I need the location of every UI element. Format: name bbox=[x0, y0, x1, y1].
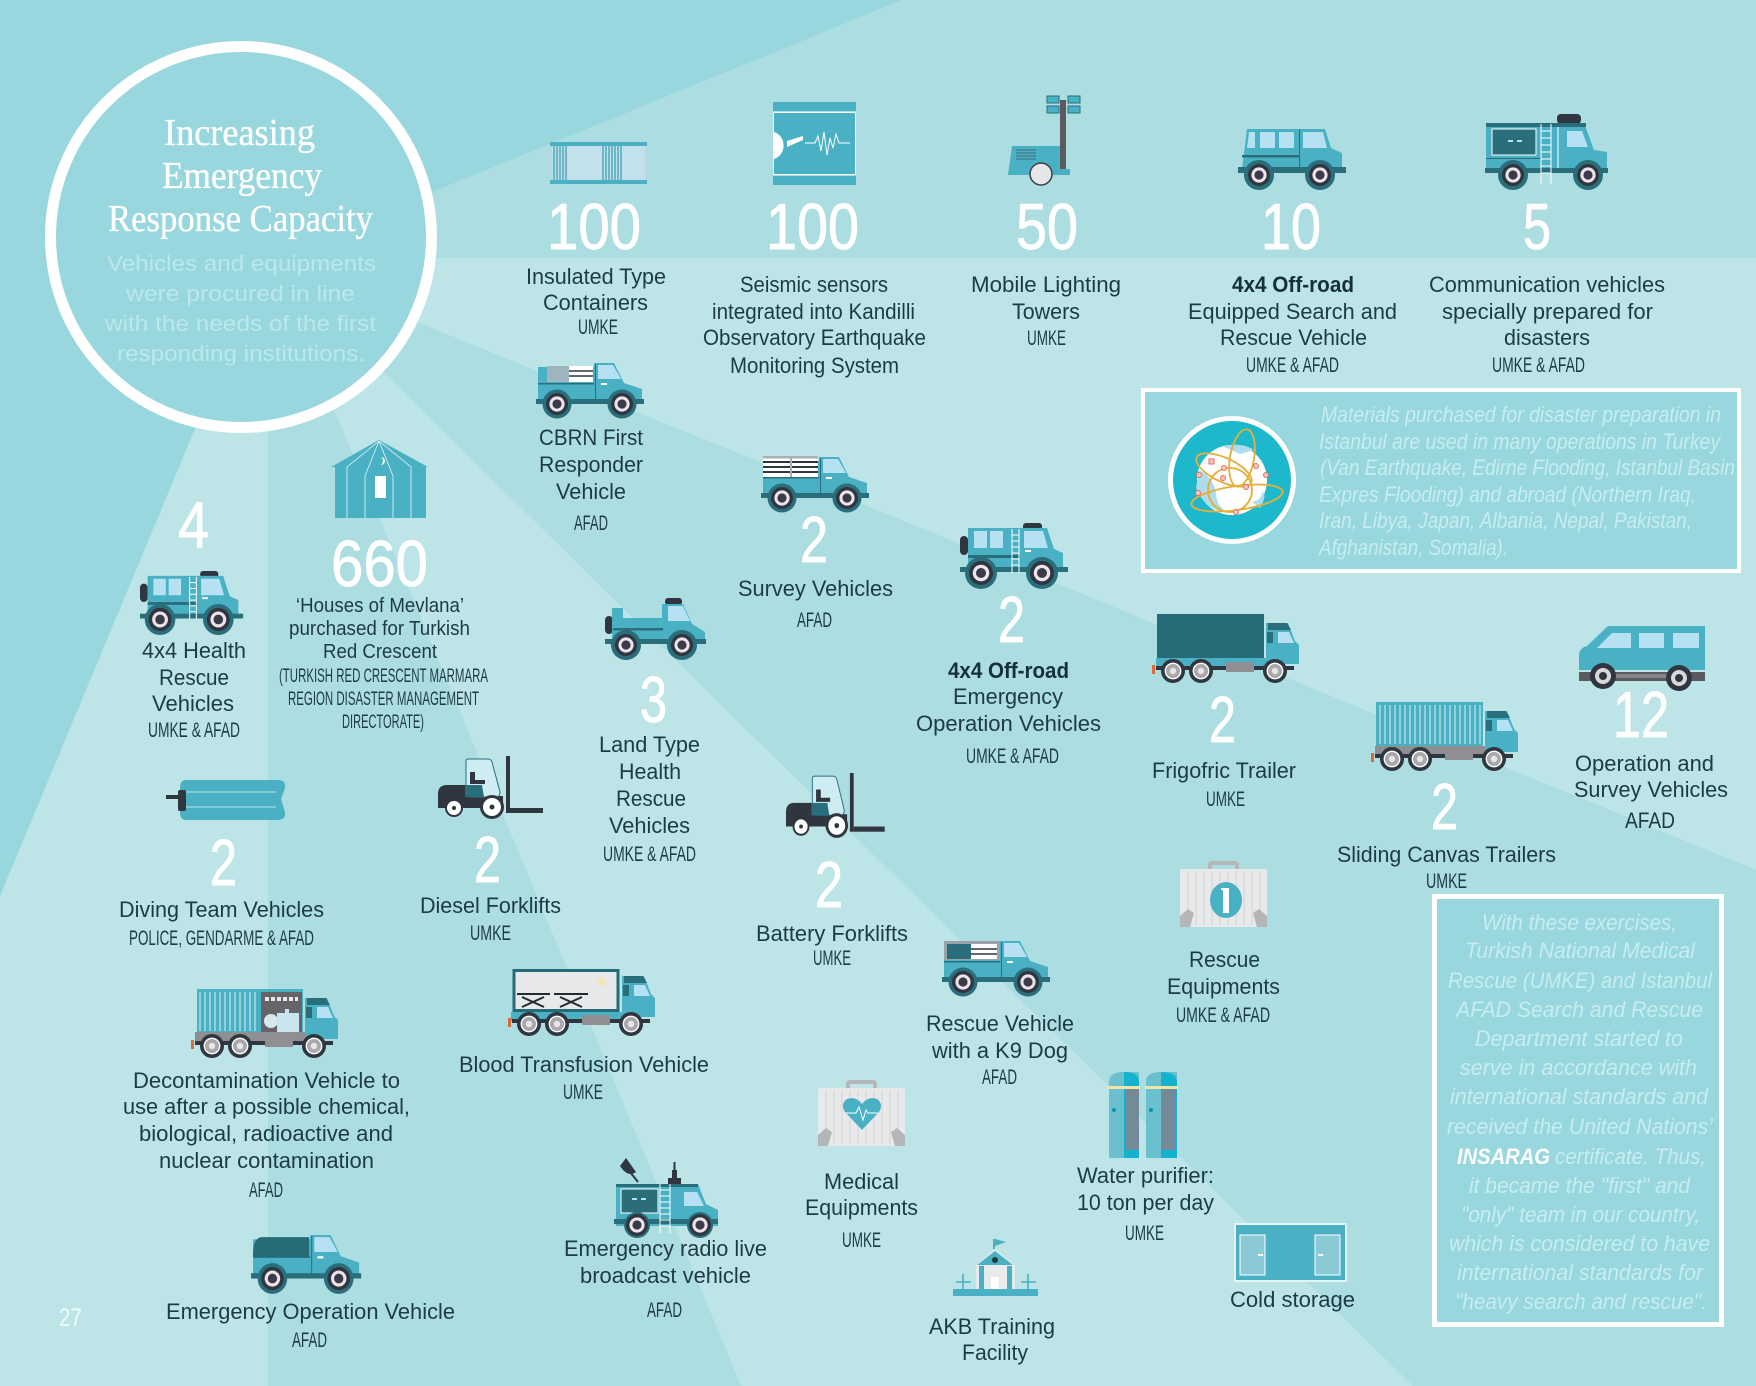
number: 2: 2 bbox=[998, 583, 1025, 656]
heading: Increasing bbox=[164, 112, 315, 154]
label: Insulated Type bbox=[526, 264, 666, 289]
item: cold storage bbox=[1230, 1224, 1355, 1312]
callout text: "only" team in our country, bbox=[1461, 1202, 1700, 1227]
label bbox=[526, 264, 666, 339]
label: Vehicles bbox=[152, 691, 234, 716]
title circle bbox=[50, 46, 432, 428]
label bbox=[166, 1299, 455, 1352]
label: Seismic sensors bbox=[740, 272, 888, 297]
label: Frigofric Trailer bbox=[1152, 758, 1296, 783]
callout text: Iran, Libya, Japan, Albania, Nepal, Pakistan, bbox=[1319, 508, 1692, 533]
label: AFAD bbox=[647, 1299, 682, 1322]
callout text: Department started to bbox=[1475, 1026, 1683, 1051]
label: purchased for Turkish bbox=[289, 618, 470, 640]
label: Blood Transfusion Vehicle bbox=[459, 1052, 709, 1077]
icon: health van bbox=[140, 571, 243, 635]
label: Red Crescent bbox=[323, 641, 437, 663]
item: CBRN first responder vehicle bbox=[536, 363, 644, 535]
icon: minivan bbox=[1579, 626, 1705, 691]
label: 4x4 Off-road bbox=[948, 658, 1069, 683]
item: 4x4 search and rescue vehicle bbox=[1188, 129, 1397, 377]
label: Observatory Earthquake bbox=[703, 325, 926, 350]
label bbox=[916, 658, 1101, 768]
item: mobile lighting towers bbox=[971, 96, 1121, 350]
item: decontamination vehicle bbox=[123, 989, 410, 1202]
label: Equipments bbox=[1167, 974, 1280, 999]
item: survey vehicles bbox=[738, 456, 893, 632]
label bbox=[1077, 1163, 1214, 1245]
page number: 27 bbox=[59, 1304, 82, 1332]
item: insulated type containers bbox=[526, 142, 666, 339]
label: Medical bbox=[824, 1169, 899, 1194]
label: Operation and bbox=[1575, 751, 1714, 776]
icon: school building bbox=[953, 1239, 1038, 1296]
label: UMKE & AFAD bbox=[966, 745, 1059, 768]
item: seismic sensors bbox=[703, 102, 926, 378]
icon: globe bbox=[1168, 416, 1296, 544]
label bbox=[738, 576, 893, 632]
label: POLICE, GENDARME & AFAD bbox=[129, 927, 314, 950]
label: AFAD bbox=[249, 1179, 283, 1202]
label bbox=[929, 1314, 1055, 1365]
label: Cold storage bbox=[1230, 1287, 1355, 1312]
label: UMKE bbox=[842, 1229, 881, 1252]
label bbox=[142, 638, 246, 742]
label: specially prepared for bbox=[1442, 299, 1653, 324]
icon: blood transfusion truck bbox=[508, 970, 655, 1036]
label: Towers bbox=[1012, 299, 1080, 324]
label: biological, radioactive and bbox=[139, 1121, 393, 1146]
label bbox=[279, 595, 488, 733]
icon: container bbox=[550, 142, 647, 184]
label bbox=[564, 1236, 767, 1322]
label: Survey Vehicles bbox=[738, 576, 893, 601]
label bbox=[703, 272, 926, 378]
label: UMKE & AFAD bbox=[148, 719, 240, 742]
label bbox=[420, 893, 561, 945]
item: diving team vehicles bbox=[119, 780, 324, 950]
item: blood transfusion vehicle bbox=[459, 970, 709, 1104]
icon: van bbox=[1238, 129, 1346, 190]
item: battery forklifts bbox=[756, 773, 908, 970]
callout text: Rescue (UMKE) and Istanbul bbox=[1448, 968, 1713, 993]
label: Equipped Search and bbox=[1188, 299, 1397, 324]
item: emergency operation vehicle bbox=[166, 1235, 455, 1352]
intro text: responding institutions. bbox=[117, 341, 365, 366]
callout text: Expres Flooding) and abroad (Northern Iraq, bbox=[1319, 482, 1696, 507]
callout text bbox=[1317, 402, 1735, 560]
label: Emergency Operation Vehicle bbox=[166, 1299, 455, 1324]
label: Health bbox=[619, 759, 681, 784]
intro text: with the needs of the first bbox=[104, 311, 376, 336]
label: broadcast vehicle bbox=[580, 1263, 751, 1288]
label: Decontamination Vehicle to bbox=[133, 1068, 400, 1093]
number: 3: 3 bbox=[640, 663, 667, 736]
callout text: certificate. Thus, bbox=[1555, 1144, 1706, 1169]
label: DIRECTORATE) bbox=[342, 712, 424, 733]
icon: water purifier tanks bbox=[1108, 1072, 1178, 1158]
intro text bbox=[104, 251, 376, 366]
icon: covered pickup bbox=[251, 1235, 361, 1294]
item: sliding canvas trailers bbox=[1337, 702, 1556, 893]
number: 2: 2 bbox=[210, 826, 237, 899]
icon: inflatable boat bbox=[166, 780, 285, 820]
label: Land Type bbox=[599, 732, 700, 757]
number: 2: 2 bbox=[1209, 683, 1236, 756]
label bbox=[1337, 842, 1556, 893]
label bbox=[1152, 758, 1296, 811]
label bbox=[1574, 751, 1728, 833]
label: Facility bbox=[962, 1340, 1028, 1365]
icon: seismograph bbox=[773, 102, 856, 185]
label: Rescue Vehicle bbox=[1220, 325, 1367, 350]
label: Water purifier: bbox=[1077, 1163, 1214, 1188]
label: 4x4 Health bbox=[142, 638, 246, 663]
icon: medical case bbox=[818, 1082, 905, 1146]
label: Diesel Forklifts bbox=[420, 893, 561, 918]
callout text: which is considered to have bbox=[1449, 1231, 1710, 1256]
label: AFAD bbox=[292, 1329, 327, 1352]
item: emergency radio live broadcast vehicle bbox=[564, 1158, 767, 1322]
label: UMKE bbox=[563, 1081, 603, 1104]
label bbox=[599, 732, 700, 866]
heading: Emergency bbox=[162, 155, 322, 197]
item: land type health rescue vehicles bbox=[599, 598, 706, 866]
label: Battery Forklifts bbox=[756, 921, 908, 946]
label: REGION DISASTER MANAGEMENT bbox=[288, 689, 479, 710]
icon: K9 truck bbox=[942, 941, 1050, 996]
intro text: Vehicles and equipments bbox=[107, 251, 376, 276]
number: 100: 100 bbox=[547, 190, 641, 263]
item: rescue vehicle with a K9 dog bbox=[926, 941, 1074, 1089]
item: 4x4 health rescue vehicles bbox=[140, 488, 246, 742]
callout text: international standards and bbox=[1450, 1084, 1709, 1109]
label: Monitoring System bbox=[730, 353, 899, 378]
label: Responder bbox=[539, 452, 643, 477]
label: Equipments bbox=[805, 1195, 918, 1220]
item: operation and survey vehicles bbox=[1574, 626, 1728, 833]
label: UMKE bbox=[470, 922, 511, 945]
label: Vehicles bbox=[609, 813, 690, 838]
callout text: AFAD Search and Rescue bbox=[1454, 997, 1703, 1022]
label: Vehicle bbox=[556, 479, 626, 504]
callout text: serve in accordance with bbox=[1460, 1055, 1697, 1080]
callout text: Afghanistan, Somalia). bbox=[1317, 535, 1508, 560]
item: rescue equipments bbox=[1167, 863, 1280, 1027]
callout text: international standards for bbox=[1457, 1260, 1705, 1285]
number: 660: 660 bbox=[331, 527, 428, 600]
icon: CBRN truck bbox=[536, 363, 644, 418]
label: CBRN First bbox=[539, 425, 643, 450]
number: 12: 12 bbox=[1613, 678, 1669, 751]
label bbox=[971, 272, 1121, 350]
label: UMKE bbox=[1027, 327, 1066, 350]
number: 50: 50 bbox=[1016, 190, 1078, 263]
label bbox=[119, 897, 324, 950]
icon: refrigerated truck bbox=[1152, 614, 1299, 683]
label bbox=[459, 1052, 709, 1104]
intro text: were procured in line bbox=[125, 281, 355, 306]
item: frigofric trailer bbox=[1152, 614, 1299, 811]
label: Rescue bbox=[1189, 947, 1260, 972]
label: Mobile Lighting bbox=[971, 272, 1121, 297]
label: Emergency radio live bbox=[564, 1236, 767, 1261]
heading bbox=[108, 112, 373, 240]
label: UMKE bbox=[1125, 1222, 1164, 1245]
label: UMKE & AFAD bbox=[1246, 354, 1339, 377]
label: Communication vehicles bbox=[1429, 272, 1665, 297]
label: nuclear contamination bbox=[159, 1148, 374, 1173]
label: AFAD bbox=[574, 512, 608, 535]
label: UMKE & AFAD bbox=[603, 843, 696, 866]
label: Operation Vehicles bbox=[916, 711, 1101, 736]
callout: INSARAG certificate bbox=[1434, 896, 1722, 1324]
icon: lighting tower bbox=[1008, 96, 1080, 185]
label: integrated into Kandilli bbox=[712, 299, 915, 324]
item: water purifier bbox=[1077, 1072, 1214, 1245]
callout text: INSARAG bbox=[1457, 1144, 1550, 1169]
label: (TURKISH RED CRESCENT MARMARA bbox=[279, 666, 488, 687]
icon: house bbox=[331, 440, 428, 518]
label: AFAD bbox=[1625, 808, 1675, 833]
icon: battery forklift bbox=[786, 773, 885, 838]
icon: broadcast truck bbox=[614, 1158, 718, 1238]
label: AFAD bbox=[982, 1066, 1017, 1089]
callout text: Turkish National Medical bbox=[1465, 938, 1696, 963]
icon: pickup bbox=[605, 598, 706, 660]
callout text bbox=[1447, 910, 1714, 1314]
icon: container truck bbox=[1371, 702, 1518, 771]
icon: diesel forklift bbox=[438, 756, 543, 819]
heading: Response Capacity bbox=[108, 198, 373, 240]
label: use after a possible chemical, bbox=[123, 1094, 410, 1119]
number: 2: 2 bbox=[815, 848, 843, 921]
label: with a K9 Dog bbox=[931, 1038, 1068, 1063]
callout text: "heavy search and rescue". bbox=[1455, 1289, 1707, 1314]
number: 2: 2 bbox=[800, 503, 828, 576]
label: Containers bbox=[543, 290, 648, 315]
label bbox=[926, 1011, 1074, 1089]
label: UMKE bbox=[1426, 870, 1467, 893]
label: Rescue bbox=[616, 786, 686, 811]
label: UMKE bbox=[1206, 788, 1245, 811]
label: UMKE & AFAD bbox=[1176, 1004, 1270, 1027]
item: diesel forklifts bbox=[420, 756, 561, 945]
item: houses of Mevlana bbox=[279, 440, 488, 733]
label bbox=[1429, 272, 1665, 377]
callout: materials used in operations bbox=[1143, 390, 1739, 571]
label bbox=[1167, 947, 1280, 1027]
item: medical equipments bbox=[805, 1082, 918, 1252]
label: Survey Vehicles bbox=[1574, 777, 1728, 802]
icon: cold storage unit bbox=[1235, 1224, 1346, 1281]
icon: communication truck bbox=[1485, 114, 1608, 190]
callout text: With these exercises, bbox=[1482, 910, 1677, 935]
icon: survey truck bbox=[761, 456, 869, 512]
label: Rescue bbox=[159, 665, 229, 690]
label: Diving Team Vehicles bbox=[119, 897, 324, 922]
item: communication vehicles bbox=[1429, 114, 1665, 377]
callout text: received the United Nations’ bbox=[1447, 1114, 1714, 1139]
label: disasters bbox=[1504, 325, 1590, 350]
label bbox=[123, 1068, 410, 1202]
label: AFAD bbox=[797, 609, 832, 632]
label: Emergency bbox=[953, 684, 1063, 709]
icon: off-road truck bbox=[960, 523, 1068, 589]
label: ‘Houses of Mevlana’ bbox=[296, 595, 464, 617]
label bbox=[756, 921, 908, 970]
icon: decontamination truck bbox=[191, 989, 338, 1058]
item: AKB training facility bbox=[929, 1239, 1055, 1365]
number: 2: 2 bbox=[1431, 770, 1458, 843]
label: Sliding Canvas Trailers bbox=[1337, 842, 1556, 867]
label: AKB Training bbox=[929, 1314, 1055, 1339]
item: 4x4 emergency operation vehicles bbox=[916, 523, 1101, 768]
label bbox=[805, 1169, 918, 1252]
label: UMKE bbox=[813, 947, 851, 970]
label: Rescue Vehicle bbox=[926, 1011, 1074, 1036]
number: 10: 10 bbox=[1261, 190, 1321, 263]
label: UMKE & AFAD bbox=[1492, 354, 1585, 377]
number: 2: 2 bbox=[474, 823, 501, 896]
number: 4: 4 bbox=[178, 488, 209, 561]
number: 5: 5 bbox=[1523, 190, 1551, 263]
label: 10 ton per day bbox=[1077, 1190, 1214, 1215]
number: 100: 100 bbox=[766, 190, 859, 263]
callout text: it became the "first" and bbox=[1469, 1173, 1691, 1198]
label: 4x4 Off-road bbox=[1232, 272, 1354, 297]
label: UMKE bbox=[578, 316, 618, 339]
label bbox=[1188, 272, 1397, 377]
label bbox=[539, 425, 643, 535]
icon: rescue case bbox=[1180, 863, 1267, 927]
